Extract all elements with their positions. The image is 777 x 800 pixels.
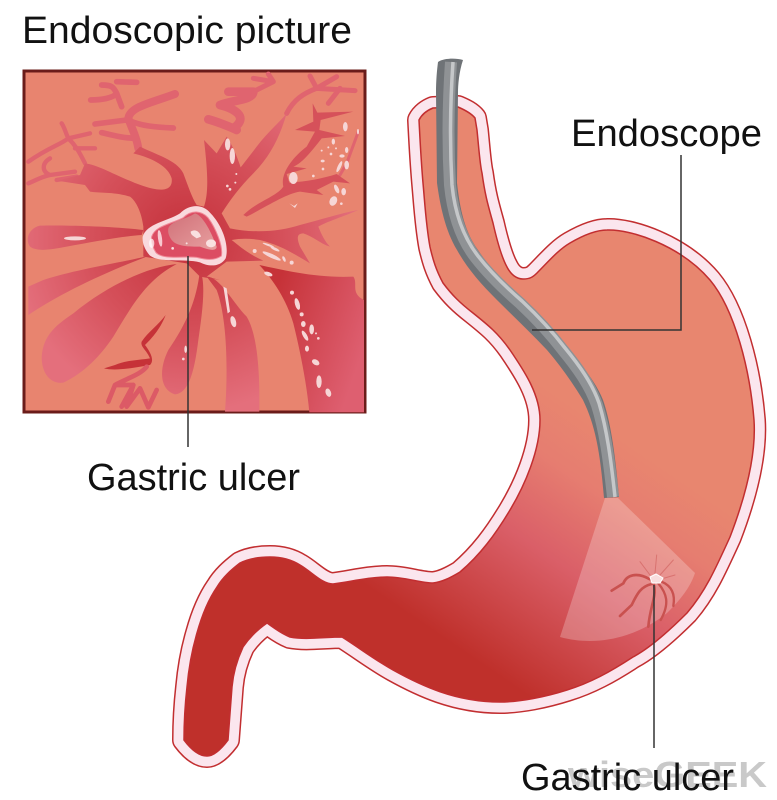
title: Endoscopic picture: Endoscopic picture	[22, 10, 352, 52]
ulcer crater	[143, 206, 227, 265]
label: Gastric ulcer (picture): Gastric ulcer	[87, 457, 300, 499]
vessel network	[28, 103, 364, 412]
label: Gastric ulcer (stomach): Gastric ulcer	[521, 757, 734, 799]
leader line: endoscope	[532, 155, 681, 330]
leader line: picture ulcer	[187, 256, 189, 447]
endoscope	[436, 59, 619, 498]
thin branches	[28, 74, 358, 183]
leader line: stomach ulcer	[653, 585, 655, 748]
stomach	[184, 107, 754, 756]
camera view cone	[560, 498, 695, 641]
watermark: wiseGEEK	[567, 754, 767, 795]
label: Endoscope: Endoscope	[571, 113, 762, 155]
mini ulcer vessels	[612, 555, 675, 627]
panel: endoscopic picture	[24, 71, 365, 412]
white lesions	[64, 122, 359, 398]
